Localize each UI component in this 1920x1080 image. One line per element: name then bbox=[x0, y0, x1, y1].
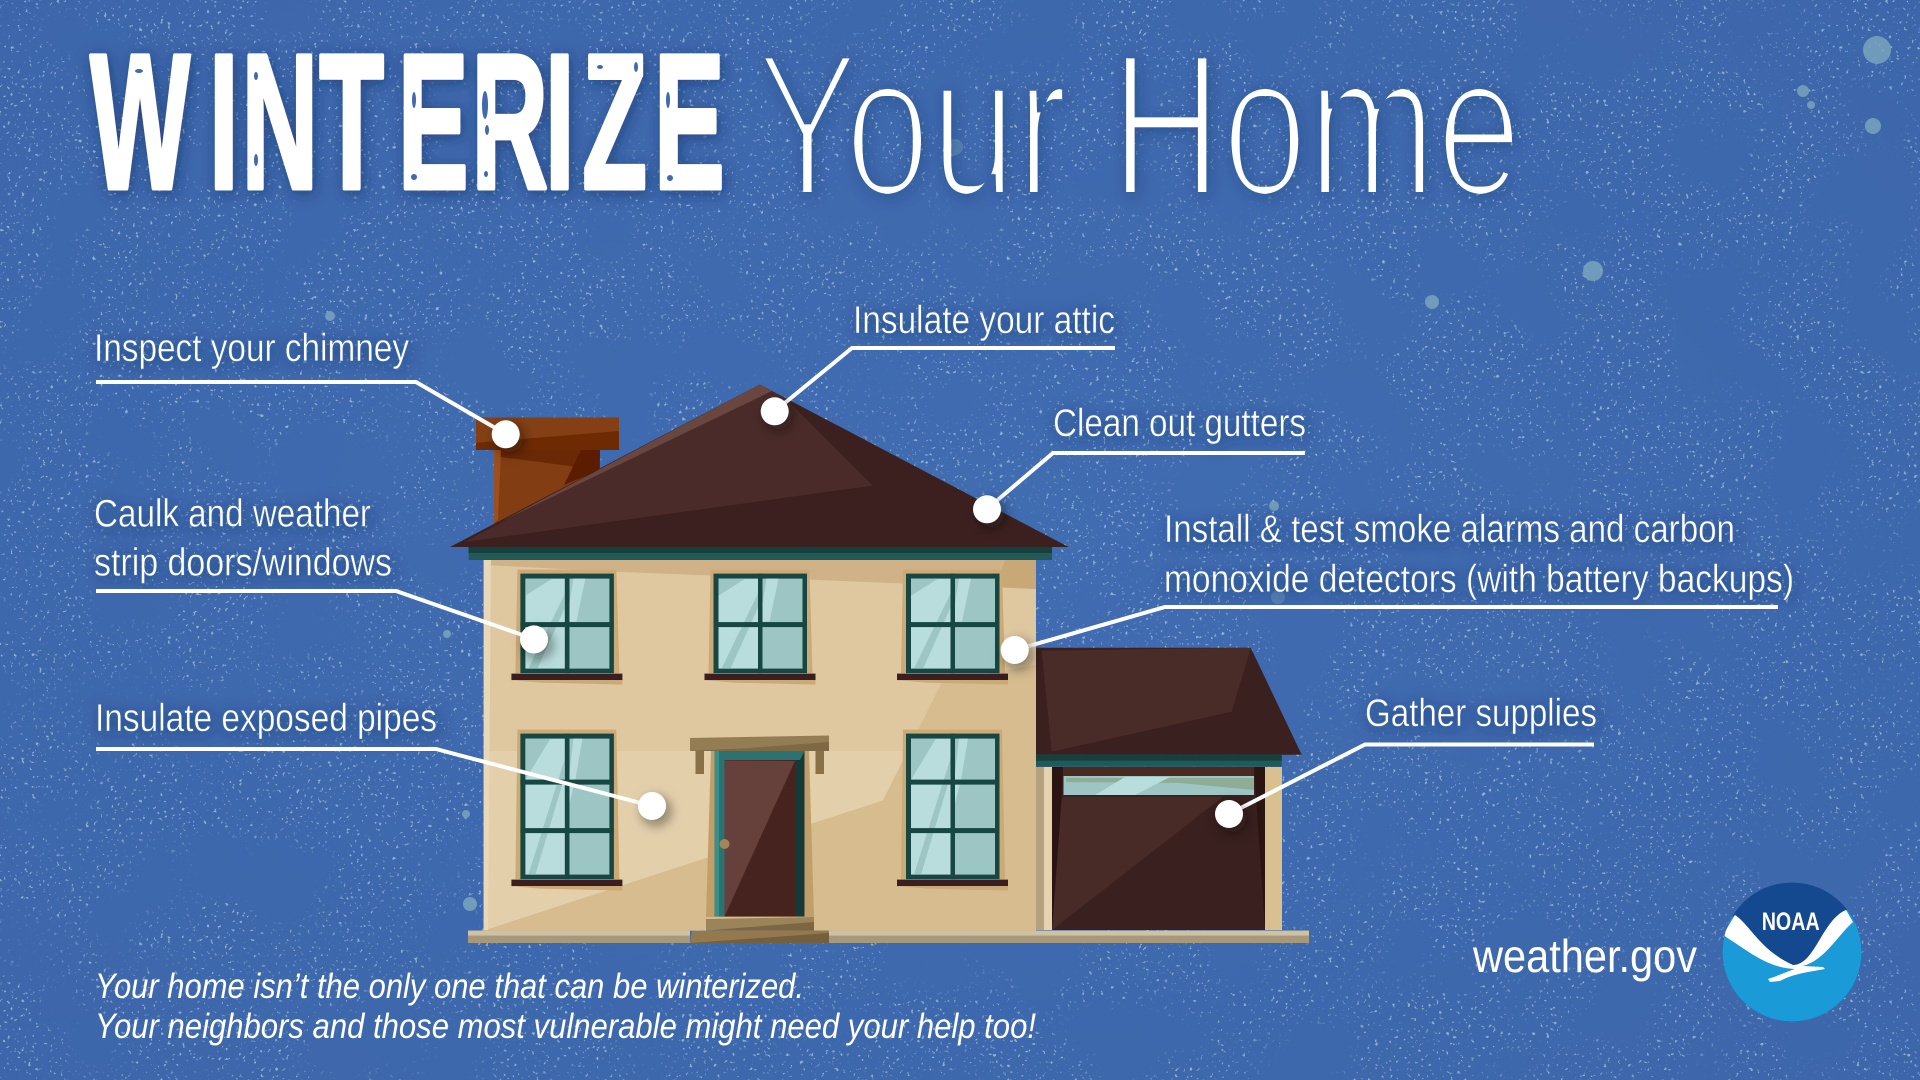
callout: inspect your chimney: Inspect your chimney bbox=[94, 327, 409, 370]
main wall bbox=[484, 560, 1036, 931]
callout: inspect your chimney bbox=[94, 327, 520, 448]
NOAA logo: NOAA bbox=[1762, 908, 1820, 936]
window: upper right bbox=[897, 570, 1008, 685]
callout: caulk and weather strip: Caulk and weather bbox=[94, 492, 371, 536]
callout: gather supplies: Gather supplies bbox=[1365, 692, 1597, 735]
door knob bbox=[720, 839, 730, 849]
callout: insulate your attic bbox=[761, 299, 1115, 425]
callout: caulk and weather strip: strip doors/windows bbox=[94, 542, 392, 584]
fascia bbox=[469, 547, 1052, 560]
main roof bbox=[450, 384, 1069, 547]
footer note: Your home isn’t the only one that can be winterized. bbox=[95, 967, 804, 1006]
title bbox=[90, 12, 1522, 239]
front door bbox=[690, 736, 829, 943]
door steps bbox=[690, 917, 829, 943]
callout: smoke alarms and detectors bbox=[1001, 508, 1794, 664]
title: your home: Your Home bbox=[756, 12, 1522, 239]
foundation bbox=[468, 931, 1309, 943]
chimney bbox=[476, 418, 619, 530]
callout: caulk and weather strip bbox=[94, 492, 548, 653]
window: lower left bbox=[511, 730, 622, 891]
garage window bbox=[1064, 776, 1254, 795]
garage roof bbox=[1036, 648, 1302, 755]
footer note: Your neighbors and those most vulnerable might need your help too! bbox=[95, 1007, 1036, 1046]
garage fascia bbox=[1036, 755, 1282, 767]
awning bbox=[690, 736, 829, 774]
callout: insulate exposed pipes bbox=[95, 697, 666, 820]
callout: clean out gutters: Clean out gutters bbox=[1053, 402, 1306, 445]
footer note bbox=[95, 967, 1036, 1046]
garage walls bbox=[1036, 767, 1282, 930]
callout: gather supplies bbox=[1215, 692, 1597, 828]
window: lower right bbox=[897, 730, 1008, 891]
NOAA logo bbox=[1722, 882, 1862, 1022]
callout: clean out gutters bbox=[973, 402, 1306, 523]
window: upper left bbox=[511, 570, 622, 685]
title: winterize: WINTERIZE bbox=[90, 15, 725, 229]
window: upper middle bbox=[704, 570, 816, 685]
callout: smoke alarms and detectors: monoxide detectors (with battery backups) bbox=[1164, 558, 1794, 601]
callout: insulate your attic: Insulate your attic bbox=[853, 299, 1115, 342]
house illustration bbox=[450, 384, 1309, 943]
callout: smoke alarms and detectors: Install & test smoke alarms and carbon bbox=[1164, 508, 1735, 551]
callout: insulate exposed pipes: Insulate exposed pipes bbox=[95, 697, 437, 740]
garage door bbox=[1052, 767, 1265, 930]
garage bbox=[1036, 648, 1302, 930]
website: weather.gov bbox=[1472, 930, 1697, 982]
